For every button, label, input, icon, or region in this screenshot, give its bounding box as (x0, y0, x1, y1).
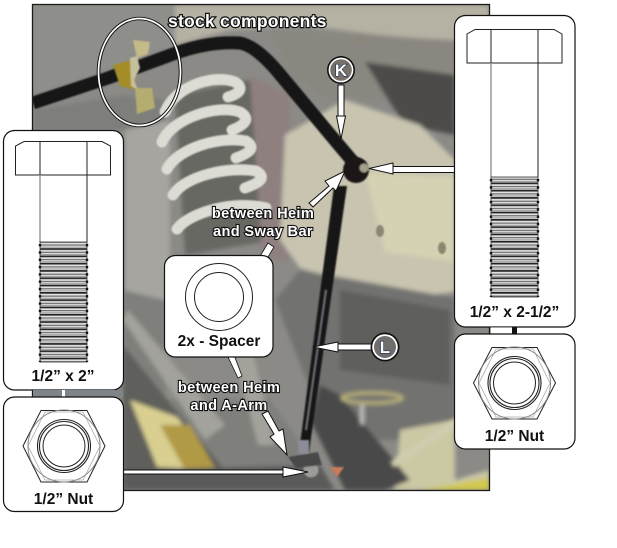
label: left nut: 1/2” Nut (34, 491, 93, 508)
sway bar (33, 43, 360, 170)
label: between Heim and A-Arm: between Heim (178, 380, 280, 396)
arrow: nut to lower heim (122, 467, 308, 477)
panel: 1/2 x 2 bolt (4, 130, 124, 390)
photo: suspension background (33, 5, 489, 490)
arrow: K to sway bar (336, 85, 346, 139)
icon: hex bolt 2 inch (16, 142, 110, 362)
arrow: spacer leader upper (259, 243, 274, 262)
panel: right nut (454, 334, 575, 449)
icon: hex nut (23, 410, 105, 482)
arrow: between heim and a-arm (262, 411, 287, 455)
lower heim joint (288, 440, 344, 478)
heim joint (343, 157, 369, 183)
label: stock components: stock components (168, 11, 327, 31)
icon: spacer washer (186, 264, 252, 330)
arrow: spacer leader lower (228, 355, 242, 378)
threads (491, 177, 538, 297)
photo: bracket clamp (113, 40, 155, 114)
callout: K: K (335, 61, 348, 80)
panel: 1/2 x 2-1/2 bolt (454, 16, 575, 327)
arrow: bolt to heim (369, 163, 455, 174)
arrow: between heim and sway bar (309, 171, 345, 207)
label: right nut: 1/2” Nut (485, 428, 544, 445)
callout: K (327, 56, 355, 84)
threads (40, 242, 87, 362)
callout: L (370, 332, 400, 362)
label: between Heim and Sway Bar: between Heim (212, 206, 314, 222)
callout: stock components ellipse (98, 18, 180, 126)
photo frame (32, 4, 490, 490)
panel: left nut (4, 397, 124, 512)
photo: shield holes (356, 37, 446, 254)
icon: hex nut (474, 347, 556, 419)
label: spacer: 2x - Spacer (178, 333, 260, 350)
link rod (299, 186, 347, 452)
label: between Heim and A-Arm: and A-Arm (190, 398, 268, 414)
label: 1/2 x 2: 1/2” x 2” (32, 368, 94, 385)
connector: right panels (490, 327, 517, 334)
label: 1/2 x 2-1/2: 1/2” x 2-1/2” (470, 304, 559, 321)
callout: L: L (380, 338, 390, 357)
connector: left panels (33, 390, 123, 397)
panel: spacer (164, 256, 273, 357)
arrow: L to rod (313, 342, 372, 352)
icon: hex bolt 2-1/2 inch (467, 30, 562, 297)
photo: a-arm ring (342, 393, 460, 465)
spring coils (162, 79, 266, 229)
label: between Heim and Sway Bar: and Sway Bar (213, 224, 313, 240)
